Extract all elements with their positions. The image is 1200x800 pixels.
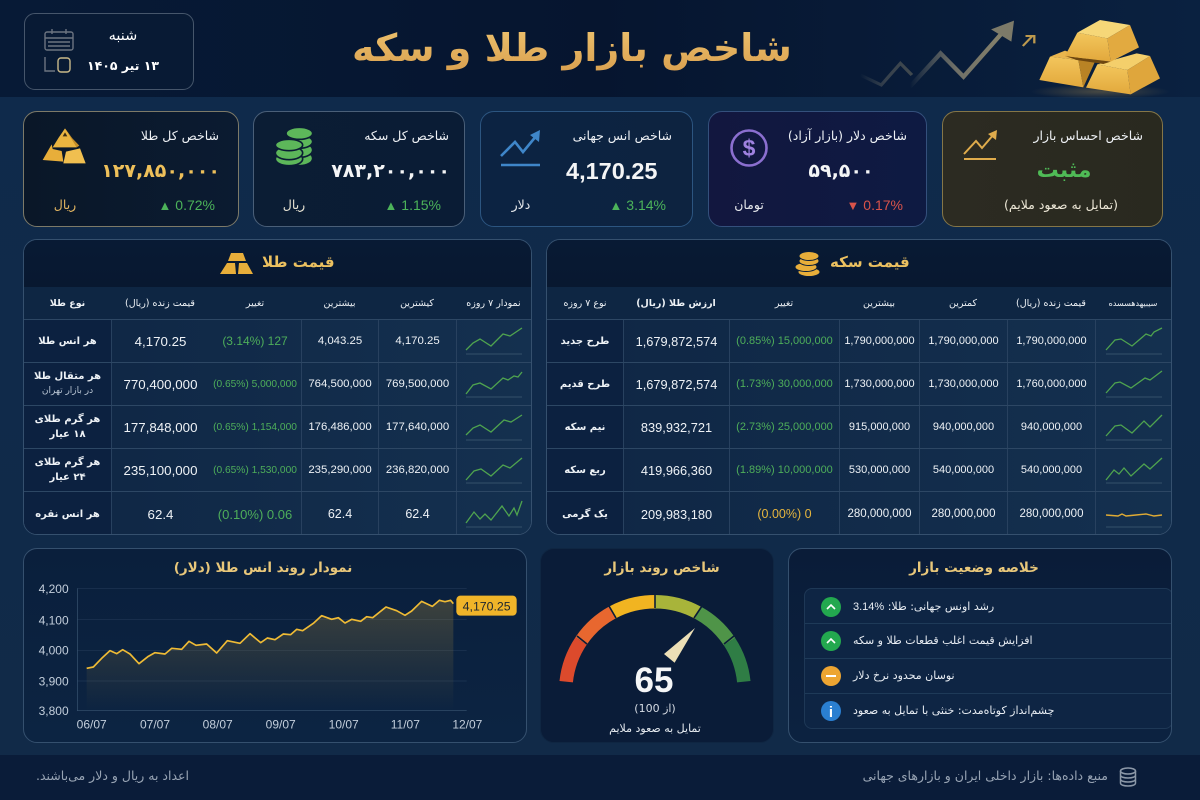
icon: green coins: [276, 128, 312, 165]
date: ۱۳ تیر ۱۴۰۵: [87, 58, 159, 73]
row: old design: (1.73%) 30,000,000: [736, 378, 833, 390]
row: mesghal: 770,400,000: [124, 376, 197, 392]
row: ounce gold: (3.14%) 127: [222, 334, 288, 348]
row: 24k gram: [24, 448, 531, 491]
unit: ریال: [54, 197, 76, 212]
unit: ریال: [283, 197, 305, 212]
row: 24k gram: 235,100,000: [124, 462, 197, 478]
row: 24k gram: (0.65%) 1,530,000: [213, 464, 297, 476]
row: mesghal: 769,500,000: [386, 378, 449, 390]
title: شاخص بازار طلا و سکه: [352, 26, 792, 70]
row: 18k gram: ۱۸ عیار: [49, 429, 86, 440]
row: new design: (0.85%) 15,000,000: [736, 334, 833, 346]
sparkline: [466, 414, 522, 440]
row: 24k gram: 235,290,000: [308, 464, 372, 476]
gauge caption: تمایل به صعود ملایم: [609, 722, 701, 735]
row: half coin: 839,932,721: [641, 420, 712, 434]
unit: تومان: [734, 197, 764, 212]
sparkline: [466, 372, 522, 398]
icon: info: i: [829, 704, 833, 721]
row: one gram: 209,983,180: [641, 506, 712, 522]
summary heading: خلاصه وضعیت بازار: [909, 560, 1039, 576]
panel: market summary: [788, 548, 1172, 743]
icon: up: [821, 631, 841, 651]
row: quarter coin: 540,000,000: [1021, 464, 1082, 476]
icon: info: [821, 701, 841, 721]
label: شاخص کل طلا: [141, 128, 219, 143]
row: old design: 1,730,000,000: [844, 378, 915, 390]
column headers: تغییر: [246, 298, 264, 308]
value: مثبت: [1037, 158, 1091, 183]
row: mesghal: (0.65%) 5,000,000: [213, 378, 297, 390]
icon: gold bars: [220, 253, 253, 274]
sparkline: [466, 500, 522, 528]
item: outlook: [821, 701, 1054, 721]
text: افزایش قیمت اغلب قطعات طلا و سکه: [853, 634, 1033, 647]
icon: coin stack: [796, 252, 820, 276]
row: silver ounce: 62.4: [148, 506, 173, 522]
icon: database: [1120, 767, 1136, 787]
sparkline: [1106, 414, 1162, 440]
row: 18k gram: 176,486,000: [308, 420, 372, 432]
row: new design: 1,679,872,574: [636, 334, 717, 348]
column headers: ارزش طلا (ریال): [636, 298, 716, 308]
sparkline: [466, 458, 522, 484]
column headers: [24, 287, 531, 319]
row: mesghal: هر متقال طلا: [34, 371, 101, 382]
row: half coin: 940,000,000: [933, 420, 994, 432]
row: quarter coin: (1.89%) 10,000,000: [736, 464, 833, 476]
row: old design: 1,760,000,000: [1016, 378, 1087, 390]
column headers: نوع طلا: [50, 298, 85, 308]
row: 18k gram: (0.65%) 1,154,000: [213, 422, 297, 432]
row: silver ounce: 62.4: [405, 506, 430, 520]
label: شاخص کل سکه: [364, 128, 449, 143]
row: old design: 1,679,872,574: [636, 376, 717, 392]
row: half coin: [547, 405, 1171, 448]
row: quarter coin: 419,966,360: [641, 462, 712, 478]
row: half coin: (2.73%) 25,000,000: [736, 420, 833, 432]
line chart: 4,200: [39, 582, 69, 596]
line chart: 11/07: [391, 717, 420, 731]
sparkline: [1106, 513, 1162, 528]
column headers: قیمت زنده (ریال): [125, 298, 195, 308]
row: half coin: 940,000,000: [1021, 420, 1082, 432]
item: dollar range: [805, 659, 1172, 694]
column headers: بیشترین: [863, 298, 895, 308]
row: half coin: 915,000,000: [849, 420, 910, 432]
change: ▼ 0.17%: [847, 197, 903, 213]
row: quarter coin: ربع سکه: [564, 464, 606, 476]
panel: market trend gauge: [540, 548, 774, 743]
column headers: کیشترین: [400, 298, 434, 308]
line chart: 4,170.25: [463, 599, 511, 613]
icon: gold pyramid: [42, 128, 86, 164]
text: رشد اونس جهانی: طلا: 3.14%: [853, 600, 994, 613]
row: old design: 1,730,000,000: [928, 378, 999, 390]
column headers: تغییر: [775, 298, 793, 308]
row: quarter coin: 540,000,000: [933, 464, 994, 476]
row: one gram: 280,000,000: [848, 508, 911, 520]
footer note: اعداد به ریال و دلار می‌باشند.: [36, 768, 189, 783]
row: 24k gram: ۲۴ عیار: [49, 472, 86, 483]
panel: ounce trend chart: [23, 548, 527, 743]
line chart: 10/07: [329, 717, 359, 731]
row: half coin: نیم سکه: [565, 422, 605, 432]
row: 24k gram: 236,820,000: [386, 464, 449, 476]
row: new design: 1,790,000,000: [1016, 334, 1087, 346]
sparkline: [466, 328, 522, 354]
icon: blue trend: [500, 130, 540, 166]
row: old design: طرح قدیم: [560, 378, 610, 390]
icon: trend arrow: [864, 20, 1036, 87]
sparkline: [1106, 370, 1162, 398]
card: coin index: [253, 111, 465, 227]
note: (تمایل به صعود ملایم): [1004, 197, 1118, 212]
gauge value: 65: [635, 661, 673, 700]
row: silver ounce: هر انس نقره: [35, 508, 100, 520]
row: ounce gold: 4,170.25: [135, 334, 186, 348]
line chart: 09/07: [266, 717, 296, 731]
icon: dollar circle: $: [743, 135, 756, 161]
icon: up: [821, 597, 841, 617]
chart heading: نمودار روند انس طلا (دلار): [174, 560, 352, 576]
column headers: بیشترین: [324, 298, 355, 308]
row: 18k gram: 177,640,000: [386, 420, 449, 432]
line chart: 4,000: [39, 644, 69, 658]
sparkline: [1106, 327, 1162, 354]
column headers: قیمت زنده (ریال): [1016, 298, 1086, 308]
row: old design: [547, 362, 1171, 405]
icon: neutral: [821, 666, 841, 686]
footer source: منبع داده‌ها: بازار داخلی ایران و بازارهای جهانی: [863, 768, 1108, 783]
panel heading band: [547, 240, 1171, 287]
column headers: کمترین: [949, 298, 977, 308]
gauge heading: شاخص روند بازار: [604, 560, 720, 576]
heading: قیمت طلا: [262, 253, 335, 271]
icon: gold trend: [963, 130, 997, 160]
change: ▲ 1.15%: [385, 197, 441, 213]
line chart: 06/07: [77, 717, 107, 731]
row: mesghal: [24, 362, 531, 405]
unit: دلار: [512, 197, 530, 212]
value: ۱۲۷,۸۵۰,۰۰۰: [101, 160, 220, 182]
column headers: نوع ۷ روزه: [563, 298, 607, 308]
line chart: 08/07: [203, 717, 233, 731]
row: 24k gram: هر گرم طلای: [35, 457, 100, 468]
panel heading band: [24, 240, 531, 287]
row: ounce gold: 4,043.25: [318, 334, 362, 346]
gauge: [560, 595, 750, 682]
line chart: 3,900: [39, 674, 69, 688]
header band: [0, 0, 1200, 97]
row: silver ounce: [24, 491, 531, 536]
panel: coin prices: [546, 239, 1172, 535]
column headers: سیبیهدهسسده: [1109, 298, 1157, 308]
card: sentiment: [942, 111, 1163, 227]
icon: calendar: [44, 29, 74, 73]
item: ounce growth: [805, 589, 1172, 624]
row: quarter coin: [547, 448, 1171, 491]
item: price rise: [805, 624, 1172, 659]
icon: dollar circle: [730, 129, 768, 167]
line chart: 07/07: [140, 717, 170, 731]
label: شاخص احساس بازار: [1033, 128, 1143, 143]
row: ounce gold: هر انس طلا: [38, 336, 97, 346]
panel: gold prices: [23, 239, 532, 535]
label: شاخص دلار (بازار آزاد): [788, 128, 907, 143]
card: dollar: [708, 111, 927, 227]
row: new design: 1,790,000,000: [928, 334, 999, 346]
line chart: 3,800: [39, 704, 69, 718]
line chart: 4,100: [39, 613, 69, 627]
row: 18k gram: هر گرم طلای: [35, 414, 100, 425]
column headers: [547, 287, 1171, 319]
scale note: (از 100): [634, 702, 676, 715]
line chart: 12/07: [452, 717, 483, 731]
date box: [24, 13, 194, 90]
row: new design: 1,790,000,000: [844, 334, 915, 346]
row: one gram: [547, 491, 1171, 536]
row: silver ounce: (0.10%) 0.06: [218, 506, 292, 522]
card: gold index: [23, 111, 239, 227]
change: ▲ 0.72%: [159, 197, 215, 213]
column headers: نمودار ۷ روزه: [466, 298, 521, 308]
sparkline: [1106, 458, 1162, 484]
heading: قیمت سکه: [830, 253, 910, 271]
row: one gram: (0.00%) 0: [757, 506, 812, 520]
row: quarter coin: 530,000,000: [849, 464, 910, 476]
label: شاخص انس جهانی: [573, 128, 672, 143]
footer band: [0, 755, 1200, 800]
row: 18k gram: [24, 405, 531, 448]
row: ounce gold: 4,170.25: [395, 334, 440, 346]
row: one gram: 280,000,000: [932, 508, 995, 520]
row: one gram: یک گرمی: [562, 508, 608, 520]
change: ▲ 3.14%: [610, 197, 666, 213]
icon: gold bars: [1039, 20, 1160, 98]
value: ۵۹,۵۰۰: [808, 160, 874, 182]
row: mesghal: در بازار تهران: [42, 386, 93, 396]
row: mesghal: 764,500,000: [308, 378, 372, 390]
value: 4,170.25: [566, 158, 657, 184]
line chart: [38, 582, 517, 731]
row: ounce gold: [24, 319, 531, 362]
text: نوسان محدود نرخ دلار: [853, 669, 955, 682]
weekday: شنبه: [109, 28, 137, 44]
summary list: [804, 588, 1173, 729]
row: 18k gram: 177,848,000: [124, 420, 197, 434]
row: new design: طرح جدید: [561, 336, 609, 346]
value: ۷۸۳,۲۰۰,۰۰۰: [331, 160, 450, 182]
row: silver ounce: 62.4: [328, 506, 352, 520]
row: new design: [547, 319, 1171, 362]
text: چشم‌انداز کوتاه‌مدت: خنثی با تمایل به صعود: [853, 704, 1054, 717]
row: one gram: 280,000,000: [1020, 508, 1083, 520]
card: world ounce: [480, 111, 693, 227]
